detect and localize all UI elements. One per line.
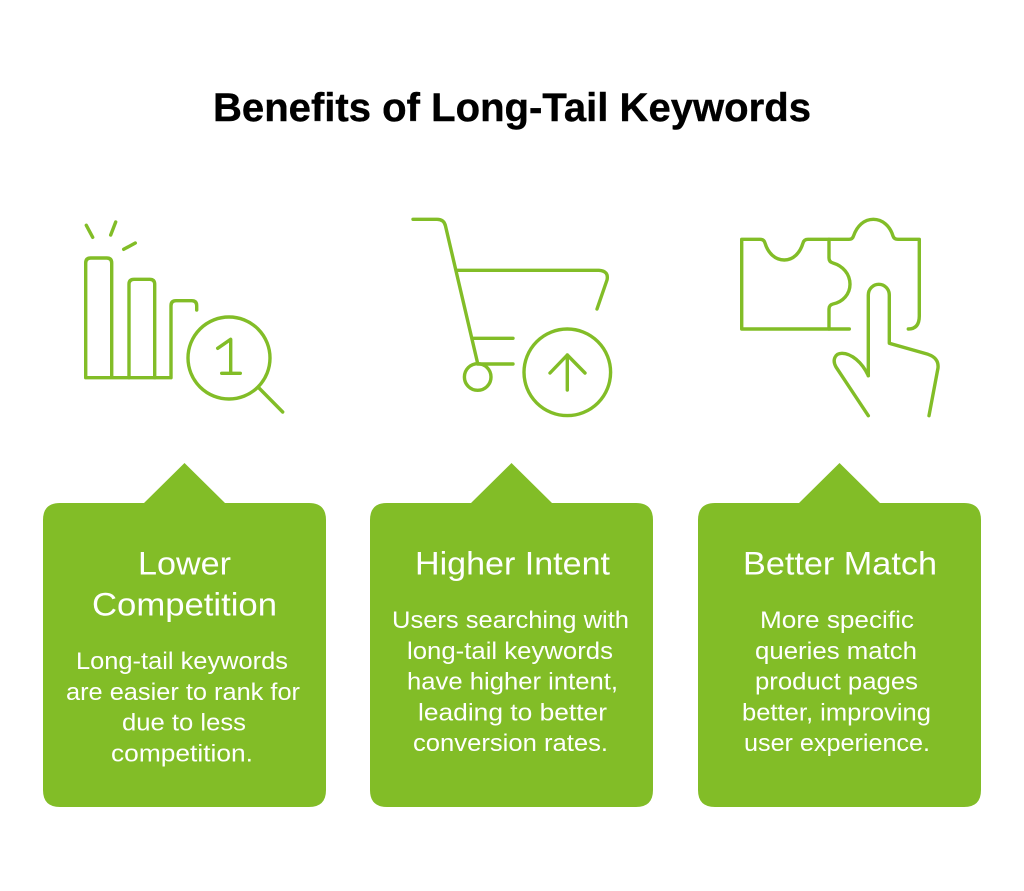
text: higher intent description: leading to better (418, 700, 607, 726)
icon: bar chart with magnifier ranking 1 (86, 222, 283, 412)
text: better match description: queries match (755, 638, 917, 665)
icon: puzzle pieces with pointing hand (742, 219, 938, 416)
text: lower competition description (66, 648, 300, 768)
heading: better match: Better Match (743, 546, 937, 582)
text: higher intent description (392, 607, 629, 757)
text: better match description (742, 607, 931, 757)
panel: higher intent (370, 463, 653, 807)
text: lower competition description: competition. (111, 740, 253, 768)
text: better match description: better, improving (742, 700, 931, 726)
heading: lower competition (92, 546, 277, 622)
text: higher intent description: conversion rates. (413, 730, 608, 757)
text: lower competition description: Long-tail keywords (76, 648, 288, 675)
text: lower competition description: due to less (122, 710, 246, 736)
heading: lower competition: Competition (92, 586, 277, 622)
text: higher intent description: Users searching with (392, 607, 629, 634)
text: higher intent description: have higher intent, (407, 668, 618, 696)
text: higher intent description: long-tail keywords (407, 638, 613, 665)
panel: lower competition (43, 463, 326, 807)
text: better match description: product pages (755, 668, 918, 696)
text: lower competition description: are easier to rank for (66, 679, 300, 706)
heading: lower competition: Lower (138, 546, 231, 582)
title: Benefits of Long-Tail Keywords (213, 86, 811, 130)
panel: better match (698, 463, 981, 807)
text: better match description: More specific (760, 607, 914, 634)
heading: higher intent: Higher Intent (415, 546, 610, 582)
icon: shopping cart with up arrow (413, 219, 611, 416)
text: better match description: user experience. (744, 730, 930, 757)
